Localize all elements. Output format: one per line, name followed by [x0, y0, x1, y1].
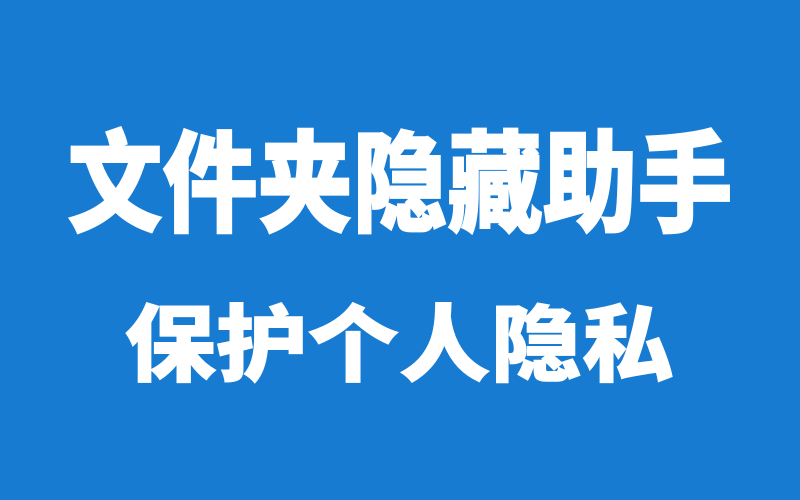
title: 文件夹隐藏助手 [67, 125, 732, 247]
subtitle: 保护个人隐私 [124, 299, 674, 393]
